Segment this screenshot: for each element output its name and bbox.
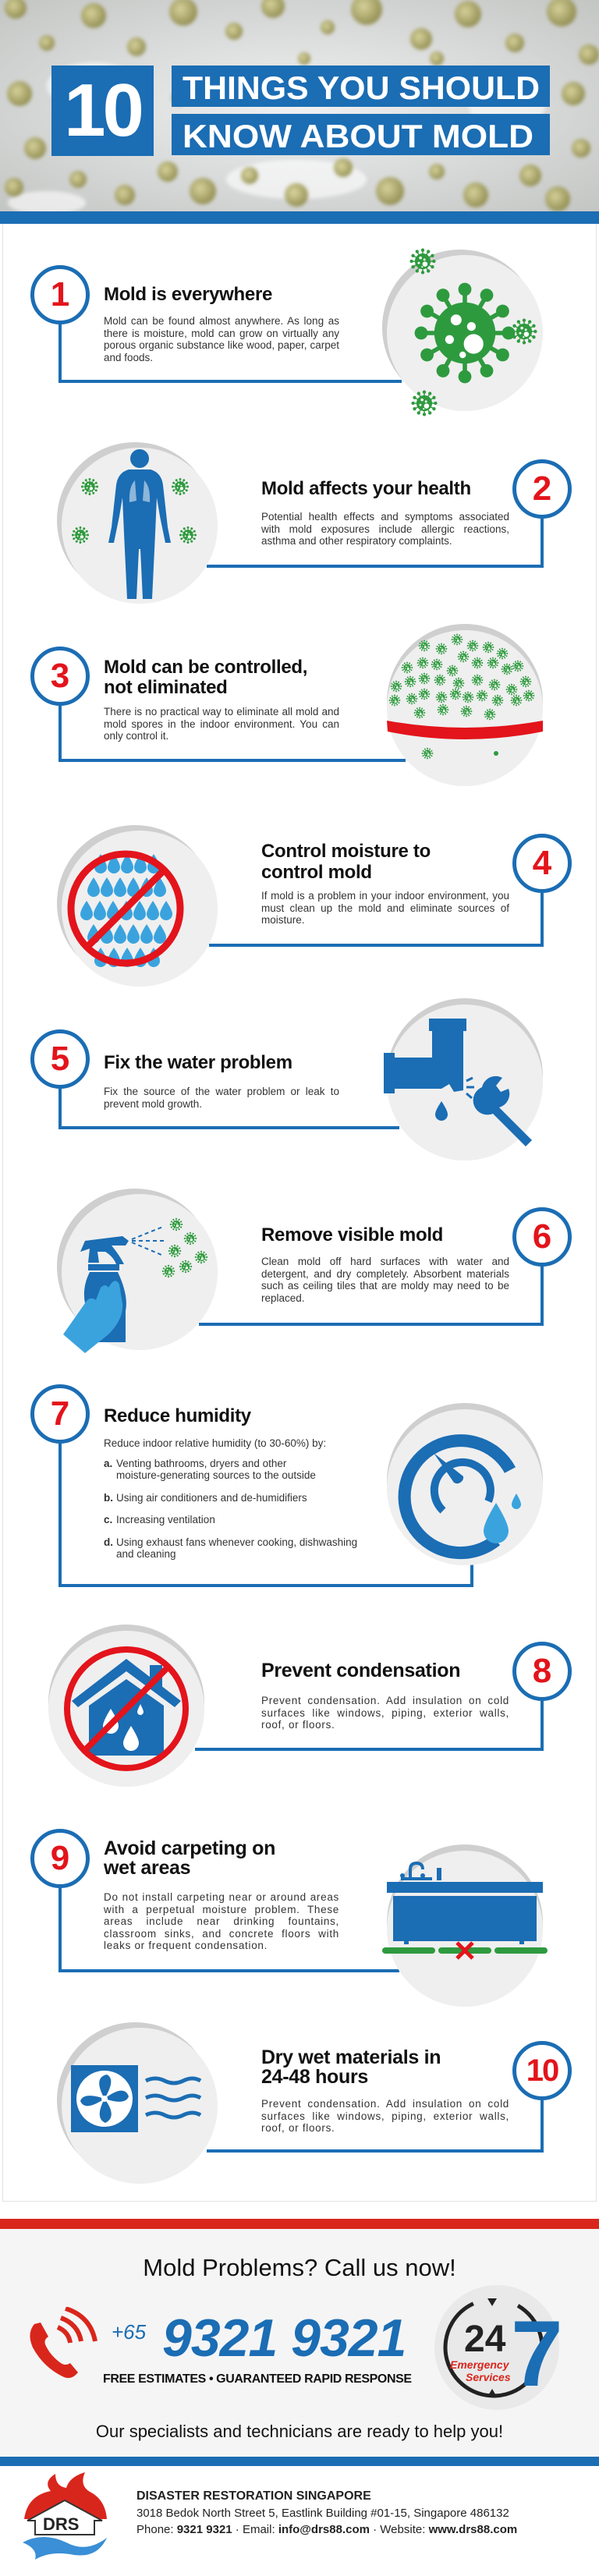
number 9 xyxy=(30,1829,90,1888)
title: 10: 10 xyxy=(64,69,141,152)
text 3: There is no practical way to eliminate all mold and mold spores in the indoor environment. You can only control it. xyxy=(104,706,339,742)
heading 3: not eliminated xyxy=(104,677,227,698)
heading 9: Avoid carpeting on xyxy=(104,1837,275,1859)
text 7: list: b. xyxy=(104,1491,113,1504)
title: 10 xyxy=(51,66,154,156)
badge 24/7: Services xyxy=(466,2371,511,2383)
text 7: list: Increasing ventilation xyxy=(116,1514,215,1525)
number 10 xyxy=(512,2041,572,2100)
text 10: Prevent condensation. Add insulation on cold surfaces like windows, piping, exterior walls, roof, or floors. xyxy=(261,2098,509,2134)
number 6: 6 xyxy=(533,1217,551,1256)
text 7: list: c. xyxy=(104,1514,112,1525)
number 4: 4 xyxy=(533,844,551,882)
company info: DISASTER RESTORATION SINGAPORE xyxy=(136,2489,371,2503)
number 5 xyxy=(30,1029,90,1089)
heading 8: Prevent condensation xyxy=(261,1660,460,1681)
heading 10 xyxy=(261,2046,441,2088)
illustration: humidity gauge xyxy=(387,1403,543,1565)
illustration: human body xyxy=(57,442,218,604)
number 7 xyxy=(30,1384,90,1444)
text 7: list: Venting bathrooms, dryers and other xyxy=(116,1457,286,1469)
illustration: virus xyxy=(382,248,543,416)
text 1: Mold can be found almost anywhere. As long as there is moisture, mold can grow on virtually any porous organic substance like wood, paper, carpet and foods. xyxy=(104,315,339,363)
text 7: list: Using air conditioners and de-humidifiers xyxy=(116,1491,307,1504)
text 7: list xyxy=(104,1437,357,1560)
ITEM 6 xyxy=(57,1189,572,1353)
frame border xyxy=(2,224,597,2202)
number 7: 7 xyxy=(51,1394,69,1433)
illustration: house with prohibition xyxy=(48,1625,204,1787)
phone number: 9321 9321 xyxy=(162,2308,406,2368)
number 1: 1 xyxy=(51,275,69,314)
text 7: list: a. xyxy=(104,1457,112,1469)
heading 4 xyxy=(261,841,431,883)
ITEM 10 xyxy=(57,2022,572,2184)
text 7: list: d. xyxy=(104,1536,113,1547)
badge 24/7 xyxy=(434,2285,562,2410)
logo: DRS: DRS xyxy=(43,2514,79,2534)
heading 2: Mold affects your health xyxy=(261,478,471,499)
heading 10: Dry wet materials in xyxy=(261,2046,441,2068)
illustration: fan with air waves xyxy=(57,2022,218,2184)
logo: DRS xyxy=(23,2472,107,2560)
number 3: 3 xyxy=(51,657,69,695)
illustration: bathtub on carpet xyxy=(382,1844,548,2007)
ITEM 5 xyxy=(30,998,543,1160)
badge 24/7: 24 xyxy=(464,2319,506,2360)
text 6: Clean mold off hard surfaces with water and detergent, and dry completely. Absorbent materials such as ceiling tiles that are moldy may need to be replaced. xyxy=(261,1256,509,1304)
title: things you should know about mold: THINGS YOU SHOULD xyxy=(183,69,540,106)
heading 10: 24-48 hours xyxy=(261,2066,368,2088)
company info: 3018 Bedok North Street 5, Eastlink Building #01-15, Singapore 486132 xyxy=(136,2507,509,2520)
heading 5: Fix the water problem xyxy=(104,1052,292,1073)
heading 4: Control moisture to xyxy=(261,841,431,862)
illustration: no water drops xyxy=(57,825,218,987)
text 7: list: and cleaning xyxy=(116,1548,176,1560)
text 8: Prevent condensation. Add insulation on cold surfaces like windows, piping, exterior walls, roof, or floors. xyxy=(261,1695,509,1731)
number 3 xyxy=(30,647,90,706)
number 5: 5 xyxy=(51,1040,69,1078)
text 2: Potential health effects and symptoms associated with mold exposures include allergic reactions, asthma and other respiratory complaints. xyxy=(261,511,509,547)
heading 1: Mold is everywhere xyxy=(104,284,272,305)
heading 3 xyxy=(104,657,307,698)
text 7: list: moisture-generating sources to the outside xyxy=(116,1469,316,1481)
number 8 xyxy=(512,1642,572,1701)
number 10: 10 xyxy=(526,2053,558,2088)
icon: red phone xyxy=(30,2307,97,2379)
number 8: 8 xyxy=(533,1652,551,1690)
number 2: 2 xyxy=(533,469,551,508)
heading 9: wet areas xyxy=(104,1857,190,1879)
ITEM 8 xyxy=(48,1625,572,1787)
title: things you should know about mold xyxy=(172,66,550,155)
ITEM 7 xyxy=(30,1384,543,1587)
illustration: controlled mold xyxy=(387,624,543,786)
heading 6: Remove visible mold xyxy=(261,1224,443,1245)
ITEM 4 xyxy=(57,825,572,987)
ITEM 1 xyxy=(30,248,543,416)
text 5: Fix the source of the water problem or leak to prevent mold growth. xyxy=(104,1086,339,1109)
footer call to action panel xyxy=(0,2219,599,2466)
text 7: list: Reduce indoor relative humidity (to 30-60%) by: xyxy=(104,1437,326,1449)
phone number: +65 xyxy=(112,2320,146,2344)
company info xyxy=(136,2489,517,2536)
ITEM 9 xyxy=(30,1829,548,2007)
badge 24/7: Emergency xyxy=(450,2358,510,2371)
illustration: leaking pipe and wrench xyxy=(384,998,543,1160)
specialists text: Our specialists and technicians are ready to help you! xyxy=(96,2422,503,2441)
title: things you should know about mold: KNOW ABOUT MOLD xyxy=(183,118,533,154)
heading 3: Mold can be controlled, xyxy=(104,657,307,678)
number 1 xyxy=(30,265,90,324)
cta heading: Mold Problems? Call us now! xyxy=(143,2254,456,2281)
ITEM 3 xyxy=(30,624,543,786)
heading 7: Reduce humidity xyxy=(104,1405,251,1426)
subline: FREE ESTIMATES • GUARANTEED RAPID RESPONSE xyxy=(103,2372,412,2386)
number 4 xyxy=(512,834,572,893)
heading 9 xyxy=(104,1837,275,1879)
text 7: list: Using exhaust fans whenever cooking, dishwashing xyxy=(116,1536,357,1547)
header: mold photo banner xyxy=(0,0,599,224)
text 9: Do not install carpeting near or around areas with a perpetual moisture problem. These areas include near drinking fountains, classroom sinks, and concrete floors with leaks or frequent condensation. xyxy=(104,1891,339,1951)
company info: Phone: 9321 9321 · Email: info@drs88.com · Website: www.drs88.com xyxy=(136,2523,517,2536)
text 4: If mold is a problem in your indoor environment, you must clean up the mold and eliminate sources of moisture. xyxy=(261,890,509,926)
heading 4: control mold xyxy=(261,862,372,883)
number 6 xyxy=(512,1207,572,1267)
badge 24/7: 7 xyxy=(511,2301,562,2406)
number 9: 9 xyxy=(51,1839,69,1877)
illustration: spray bottle and hand xyxy=(57,1189,218,1353)
ITEM 2 xyxy=(57,442,572,604)
number 2 xyxy=(512,459,572,519)
